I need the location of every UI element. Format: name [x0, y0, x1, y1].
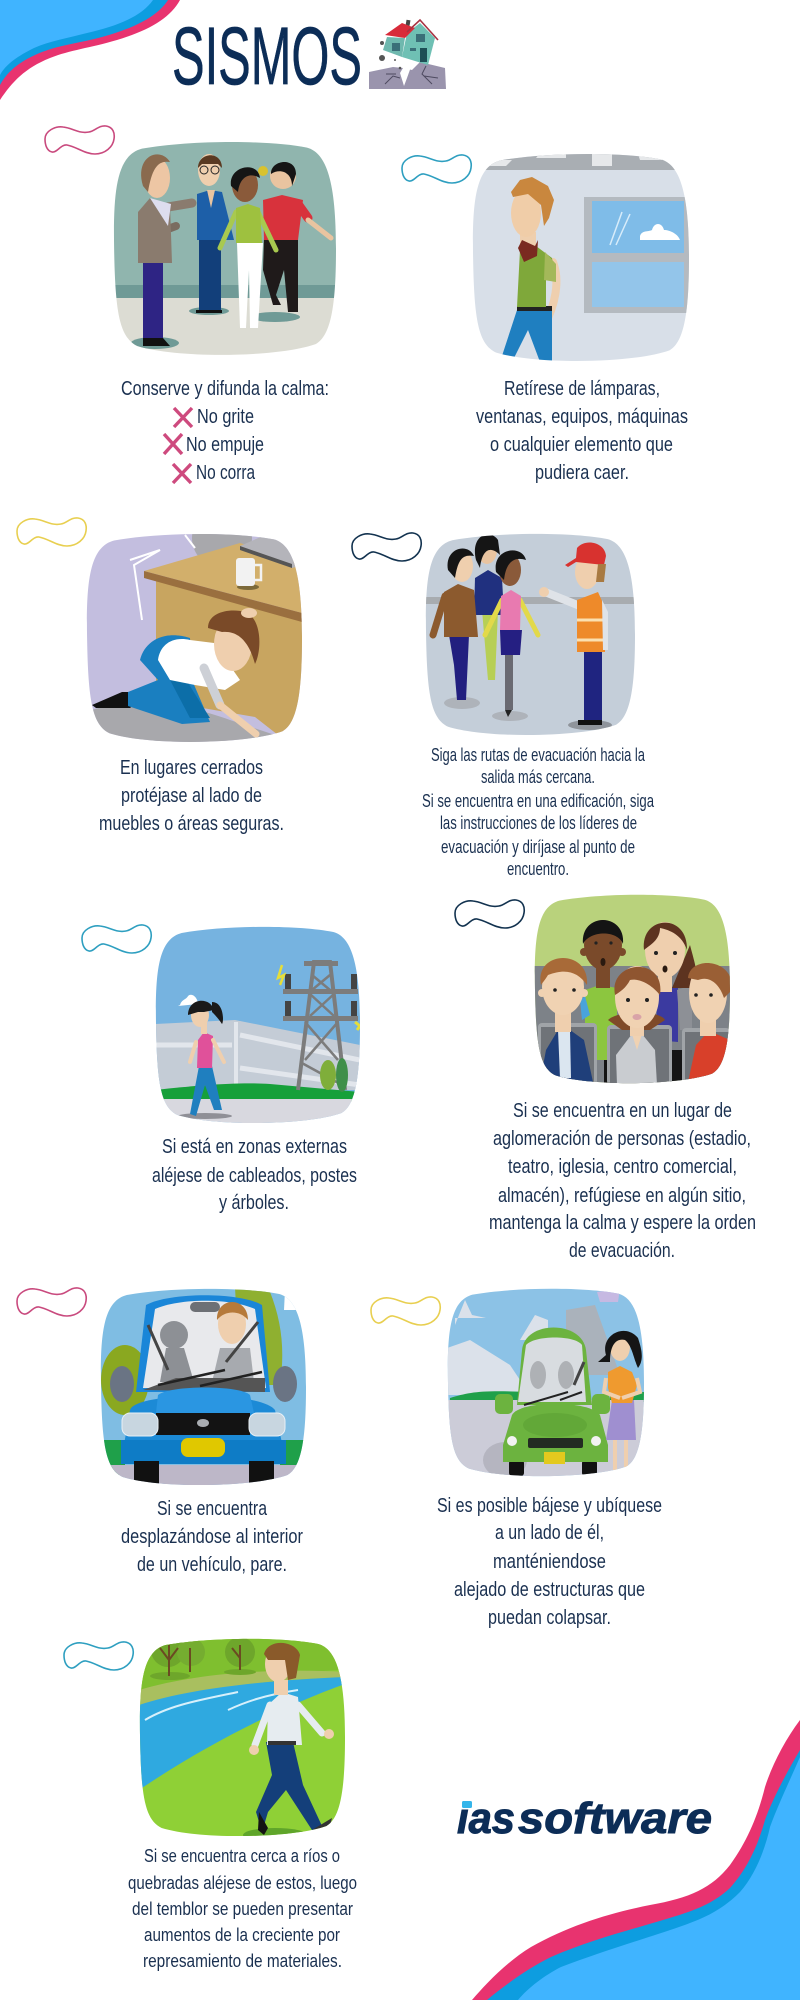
caption: driving — [121, 1497, 303, 1576]
squiggle: navy — [352, 533, 421, 561]
caption: calm: No corra — [196, 461, 255, 484]
icon: house falling into a crack — [369, 20, 446, 89]
caption: driving: Si se encuentra — [157, 1497, 267, 1520]
caption: rivers — [128, 1846, 357, 1971]
caption: get out of the car: manténiendose — [493, 1550, 606, 1573]
caption: get out of the car: alejado de estructuras que — [454, 1578, 645, 1601]
illustration: crowd in seats — [534, 893, 732, 1086]
caption: get out of the car: puedan colapsar. — [488, 1606, 611, 1629]
illustration: man by window — [472, 152, 689, 363]
panel: closed places — [17, 508, 302, 835]
panel: lamps and windows — [402, 152, 689, 484]
squiggle: teal — [402, 155, 471, 183]
illustration: woman next to green car — [447, 1287, 644, 1478]
panel: evacuation routes — [352, 532, 655, 879]
panel: crowded places — [455, 893, 756, 1262]
caption: evacuation routes: Si se encuentra en una edificación, siga — [422, 791, 655, 811]
panel: calm — [45, 126, 336, 484]
panel: outdoors — [82, 925, 360, 1214]
bottom-right corner wave — [472, 1720, 800, 2000]
squiggle: pink — [45, 126, 114, 154]
illustration: man walking by river — [139, 1633, 345, 1842]
caption: lamps: o cualquier elemento que — [490, 433, 673, 456]
panel: driving — [17, 1287, 306, 1576]
caption: crowded places — [489, 1099, 756, 1262]
icon: cross 3 — [173, 464, 191, 483]
squiggle: yellow — [371, 1297, 440, 1325]
caption: rivers: aumentos de la creciente por — [144, 1925, 340, 1945]
caption: calm: Conserve y difunda la calma: — [121, 377, 329, 400]
illustration: group of people — [113, 140, 336, 358]
caption: outdoors: aléjese de cableados, postes — [152, 1164, 357, 1187]
squiggle: yellow — [17, 518, 86, 546]
caption: crowded places: de evacuación. — [569, 1239, 675, 1262]
caption: lamps: ventanas, equipos, máquinas — [476, 405, 688, 428]
panel: get out of the car — [371, 1287, 662, 1629]
caption: evacuation routes: las instrucciones de los líderes de — [440, 813, 637, 833]
illustration: woman near power tower — [155, 925, 360, 1125]
caption: calm — [121, 377, 329, 484]
caption: outdoors — [152, 1135, 357, 1214]
caption: outdoors: y árboles. — [219, 1191, 289, 1214]
squiggle: teal — [82, 925, 151, 953]
caption: get out of the car: Si es posible bájese y ubíquese — [437, 1494, 662, 1517]
caption: rivers: quebradas aléjese de estos, luego — [128, 1873, 357, 1893]
caption: crowded places: teatro, iglesia, centro comercial, — [508, 1155, 737, 1178]
icon: cross 2 — [164, 434, 182, 454]
caption: lamps: Retírese de lámparas, — [504, 377, 660, 400]
caption: closed places: En lugares cerrados — [120, 756, 263, 779]
caption: closed places — [99, 756, 284, 835]
caption: evacuation routes: evacuación y diríjase al punto de — [441, 837, 635, 857]
caption: get out of the car: a un lado de él, — [495, 1521, 604, 1544]
top-left corner wave — [0, 0, 180, 100]
caption: rivers: represamiento de materiales. — [143, 1951, 342, 1971]
logo: ias software: software — [518, 1794, 712, 1843]
illustration: blue car front — [100, 1287, 306, 1490]
caption: evacuation routes: salida más cercana. — [481, 767, 595, 787]
caption: calm: No grite — [197, 405, 254, 428]
caption: rivers: Si se encuentra cerca a ríos o — [144, 1846, 340, 1866]
caption: crowded places: Si se encuentra en un lugar de — [513, 1099, 732, 1122]
caption: evacuation routes: encuentro. — [507, 859, 569, 879]
caption: outdoors: Si está en zonas externas — [162, 1135, 347, 1158]
caption: get out of the car — [437, 1494, 662, 1629]
logo: ias software: ias — [457, 1794, 515, 1843]
caption: lamps: pudiera caer. — [535, 461, 629, 484]
caption: calm: No empuje — [186, 433, 264, 456]
caption: evacuation routes: Siga las rutas de evacuación hacia la — [431, 745, 646, 765]
panel: rivers — [64, 1633, 357, 1971]
squiggle: navy — [455, 900, 524, 928]
illustration: man under desk — [86, 534, 302, 742]
icon: cross — [174, 408, 192, 427]
squiggle: pink — [17, 1288, 86, 1316]
illustration: evacuation leader — [425, 532, 635, 737]
squiggle: teal — [64, 1642, 133, 1670]
caption: closed places: protéjase al lado de — [121, 784, 262, 807]
caption: rivers: del temblor se pueden presentar — [132, 1899, 353, 1919]
caption: lamps — [476, 377, 688, 484]
caption: closed places: muebles o áreas seguras. — [99, 812, 284, 835]
title: SISMOS — [172, 11, 362, 102]
caption: driving: desplazándose al interior — [121, 1525, 303, 1548]
caption: driving: de un vehículo, pare. — [137, 1553, 287, 1576]
caption: evacuation routes — [422, 745, 655, 879]
